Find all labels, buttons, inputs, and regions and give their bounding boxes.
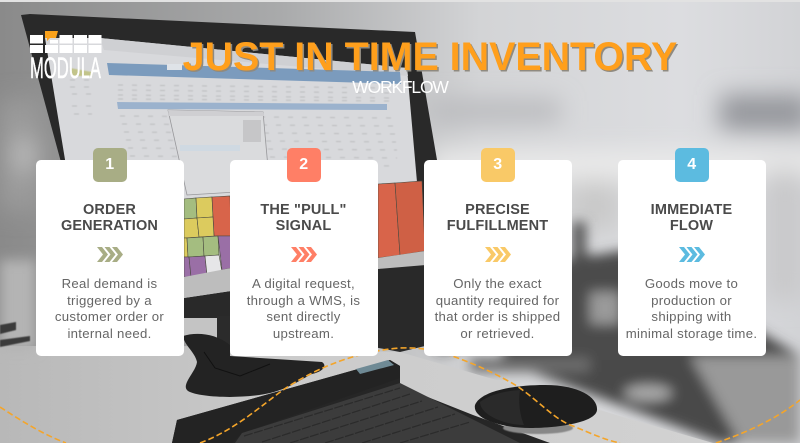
body text 2: through a WMS, is xyxy=(247,293,360,308)
step number 1: 1 xyxy=(105,156,114,173)
body text 2: sent directly xyxy=(266,309,341,324)
step number 3 xyxy=(481,148,514,182)
software dialog xyxy=(168,110,270,195)
body text 3: or retrieved. xyxy=(460,326,535,341)
body text 2: upstream. xyxy=(273,326,334,341)
heading 4: IMMEDIATE xyxy=(651,202,732,218)
logo orange tab xyxy=(45,31,58,41)
icon: chevrons 2 xyxy=(291,247,317,262)
subtitle: WORKFLOW xyxy=(352,77,448,97)
desk xyxy=(0,346,713,443)
logo blocks xyxy=(30,35,102,53)
colored screen grid xyxy=(184,181,425,277)
body text 4: production or xyxy=(651,293,732,308)
dashed orange curve xyxy=(0,348,800,443)
panel: step 4 immediate flow xyxy=(618,160,766,356)
heading 2: SIGNAL xyxy=(276,218,331,234)
panel: step 3 precise fulfillment xyxy=(424,160,572,356)
panel: step 1 order generation xyxy=(36,160,184,356)
title: JUST IN TIME INVENTORY xyxy=(183,35,677,79)
step number 4 xyxy=(675,148,708,182)
panel: step 2 pull signal xyxy=(230,160,378,356)
step number 4: 4 xyxy=(687,156,696,173)
screen xyxy=(45,38,424,298)
step number 2: 2 xyxy=(299,156,308,173)
keyboard xyxy=(172,360,550,443)
body text 1 xyxy=(55,276,164,341)
icon: chevrons 1 xyxy=(97,247,123,262)
body text 1: customer order or xyxy=(55,309,164,324)
step number 3: 3 xyxy=(493,156,502,173)
body text 3: quantity required for xyxy=(436,293,559,308)
heading 2 xyxy=(260,202,347,234)
body text 4: minimal storage time. xyxy=(626,326,757,341)
step number 2 xyxy=(287,148,320,182)
body text 1: triggered by a xyxy=(67,293,152,308)
body text 4: Goods move to xyxy=(645,276,738,291)
heading 3: PRECISE xyxy=(465,202,530,218)
logo xyxy=(30,31,102,82)
body text 4 xyxy=(626,276,757,341)
body text 1: internal need. xyxy=(67,326,152,341)
body text 3: Only the exact xyxy=(453,276,542,291)
monitor xyxy=(21,14,450,352)
mouse xyxy=(503,422,573,434)
body text 3: that order is shipped xyxy=(435,309,560,324)
heading 3: FULFILLMENT xyxy=(447,218,548,234)
icon: chevrons 4 xyxy=(679,247,705,262)
heading 1: ORDER xyxy=(83,202,136,218)
heading 1 xyxy=(61,202,158,234)
body text 2 xyxy=(246,276,360,341)
body text 2: A digital request, xyxy=(252,276,355,291)
heading 1: GENERATION xyxy=(61,218,158,234)
body text 1: Real demand is xyxy=(62,276,157,291)
heading 4 xyxy=(651,202,732,234)
monitor stand xyxy=(184,318,219,338)
step number 1 xyxy=(93,148,126,182)
body text 4: shipping with xyxy=(651,309,732,324)
blurred office xyxy=(0,95,800,300)
body text 3 xyxy=(434,276,560,341)
heading 2: THE "PULL" xyxy=(260,202,347,218)
icon: chevrons 3 xyxy=(485,247,511,262)
heading 3 xyxy=(447,202,548,234)
heading 4: FLOW xyxy=(670,218,713,234)
